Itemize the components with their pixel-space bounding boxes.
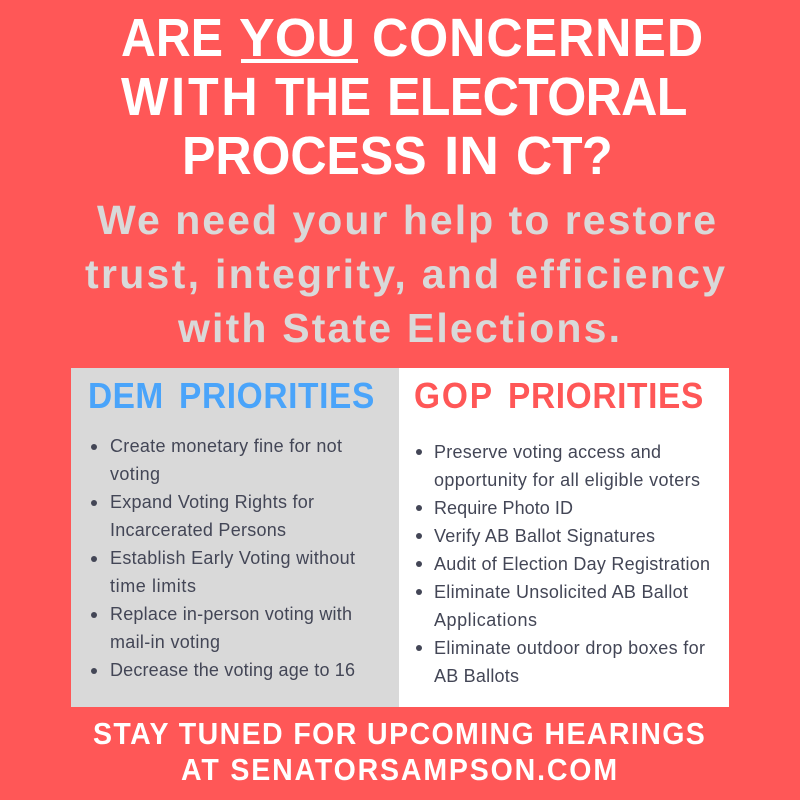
subtitle bbox=[85, 197, 725, 351]
heading: dem priorities: DEM bbox=[88, 377, 163, 416]
list: dem priorities: Expand Voting Rights for bbox=[110, 492, 314, 512]
footer call to action bbox=[93, 717, 705, 787]
list: gop priorities: Audit of Election Day Registration bbox=[434, 554, 710, 574]
list: gop priorities: Require Photo ID bbox=[434, 498, 573, 518]
title: IN bbox=[444, 126, 499, 186]
list: gop priorities: opportunity for all eligible voters bbox=[434, 470, 700, 490]
list: gop priorities: Eliminate Unsolicited AB Ballot bbox=[434, 582, 688, 602]
subtitle: with State Elections. bbox=[177, 305, 620, 351]
footer call to action: AT SENATORSAMPSON.COM bbox=[181, 753, 617, 787]
panel: gop priorities bbox=[399, 368, 729, 707]
title: YOU bbox=[239, 8, 355, 68]
title bbox=[121, 8, 703, 186]
heading: gop priorities bbox=[414, 377, 703, 416]
list: gop priorities: Verify AB Ballot Signatures bbox=[434, 526, 655, 546]
title: CONCERNED bbox=[372, 8, 703, 68]
list: dem priorities bbox=[91, 436, 355, 680]
title: ARE bbox=[121, 8, 223, 68]
list: gop priorities: Applications bbox=[434, 610, 537, 630]
list: gop priorities: AB Ballots bbox=[434, 666, 519, 686]
list: dem priorities: Establish Early Voting without bbox=[110, 548, 355, 568]
list: dem priorities: time limits bbox=[110, 576, 196, 596]
title: ELECTORAL bbox=[387, 67, 687, 127]
title: WITH bbox=[121, 67, 258, 127]
heading: gop priorities: GOP bbox=[414, 377, 492, 416]
title: THE bbox=[275, 67, 371, 127]
list: dem priorities: Incarcerated Persons bbox=[110, 520, 286, 540]
list: gop priorities bbox=[416, 442, 710, 686]
list: dem priorities: Replace in-person voting with bbox=[110, 604, 352, 624]
list: dem priorities: Decrease the voting age to 16 bbox=[110, 660, 355, 680]
list: dem priorities: Create monetary fine for not bbox=[110, 436, 342, 456]
footer call to action: STAY TUNED FOR UPCOMING HEARINGS bbox=[93, 717, 705, 751]
heading: dem priorities: PRIORITIES bbox=[179, 377, 374, 416]
title: CT? bbox=[516, 126, 613, 186]
subtitle: We need your help to restore bbox=[97, 197, 716, 243]
heading: gop priorities: PRIORITIES bbox=[508, 377, 703, 416]
title: PROCESS bbox=[182, 126, 427, 186]
list: gop priorities: Eliminate outdoor drop boxes for bbox=[434, 638, 705, 658]
subtitle: trust, integrity, and efficiency bbox=[85, 251, 725, 297]
panel: dem priorities bbox=[71, 368, 399, 707]
heading: dem priorities bbox=[88, 377, 374, 416]
list: dem priorities: voting bbox=[110, 464, 160, 484]
list: dem priorities: mail-in voting bbox=[110, 632, 220, 652]
list: gop priorities: Preserve voting access and bbox=[434, 442, 661, 462]
